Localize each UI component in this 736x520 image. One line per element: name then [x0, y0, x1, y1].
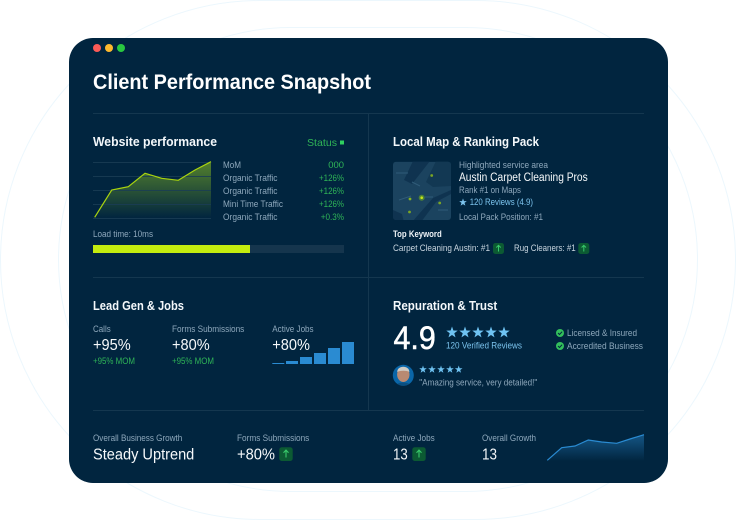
heading: Local Map & Ranking Pack	[393, 134, 540, 149]
review stars	[419, 366, 463, 373]
business details: Rank #1 on Maps	[459, 185, 521, 195]
panel: lead gen and jobs	[93, 298, 354, 366]
window controls	[93, 44, 125, 52]
bar chart	[272, 342, 354, 364]
overall growth	[482, 433, 536, 463]
business details: Local Pack Position: #1	[459, 212, 543, 222]
calls metric	[93, 324, 135, 366]
active jobs: 13	[393, 446, 408, 463]
forms submissions metric: +80%	[172, 337, 210, 354]
metrics table: +126%	[319, 199, 344, 209]
metrics table: +126%	[319, 186, 344, 196]
metrics table: Organic Traffic	[223, 186, 278, 196]
metrics table: 000	[328, 160, 344, 170]
heading: Website performance	[93, 134, 217, 149]
active jobs metric: +80%	[272, 337, 310, 354]
forms submissions metric: Forms Submissions	[172, 324, 245, 334]
overall business growth: Overall Business Growth	[93, 433, 182, 443]
growth sparkline	[547, 435, 644, 461]
overall business growth: Steady Uptrend	[93, 446, 194, 463]
panel: reputation and trust	[392, 298, 643, 388]
calls metric: +95%	[93, 337, 131, 354]
top keywords: Carpet Cleaning Austin: #1	[393, 243, 490, 253]
business details: Highlighted service area	[459, 160, 549, 170]
active jobs	[393, 433, 435, 463]
status indicator: Status	[307, 137, 337, 149]
metrics table: +0.3%	[321, 212, 344, 222]
rating score: 4.9	[394, 320, 436, 356]
metrics table: Organic Traffic	[223, 173, 278, 183]
panel: local map and ranking	[393, 134, 589, 254]
load time bar	[93, 245, 344, 253]
verified reviews: 120 Verified Reviews	[446, 339, 522, 350]
business details	[459, 160, 588, 222]
forms submissions metric: +95% MOM	[172, 356, 214, 366]
load time label: Load time: 10ms	[93, 229, 153, 239]
business details: Austin Carpet Cleaning Pros	[459, 172, 588, 184]
heading: Lead Gen & Jobs	[93, 298, 184, 313]
active jobs metric: Active Jobs	[272, 324, 314, 334]
review quote: "Amazing service, very detailed!"	[419, 378, 537, 388]
map thumbnail	[393, 161, 451, 222]
overall growth: Overall Growth	[482, 433, 536, 443]
customer avatar	[392, 364, 414, 386]
panel: summary row	[93, 433, 644, 463]
rating stars	[446, 326, 510, 337]
trust badges	[556, 328, 643, 351]
calls metric: +95% MOM	[93, 356, 135, 366]
calls metric: Calls	[93, 324, 111, 334]
forms submissions: +80%	[237, 446, 275, 463]
metrics table	[223, 160, 344, 222]
title: Client Performance Snapshot	[93, 71, 371, 94]
business details: 120 Reviews (4.9)	[470, 196, 533, 207]
top keywords: Top Keyword	[393, 229, 442, 239]
forms submissions: Forms Submissions	[237, 433, 310, 443]
area chart	[93, 162, 211, 218]
forms submissions	[237, 433, 310, 463]
panel: website performance	[93, 134, 344, 253]
trust badges: Accredited Business	[567, 341, 643, 351]
dashboard card	[69, 38, 668, 483]
heading: Repuration & Trust	[393, 298, 498, 313]
top keywords	[393, 229, 589, 254]
overall business growth	[93, 433, 194, 463]
forms submissions metric	[172, 324, 245, 366]
metrics table: Organic Traffic	[223, 212, 278, 222]
top keywords: Rug Cleaners: #1	[514, 243, 576, 253]
trust badges: Licensed & Insured	[567, 328, 637, 338]
active jobs: Active Jobs	[393, 433, 435, 443]
metrics table: Mini Time Traffic	[223, 199, 283, 209]
metrics table: MoM	[223, 160, 241, 170]
active jobs metric	[272, 324, 314, 354]
overall growth: 13	[482, 446, 497, 463]
metrics table: +126%	[319, 173, 344, 183]
